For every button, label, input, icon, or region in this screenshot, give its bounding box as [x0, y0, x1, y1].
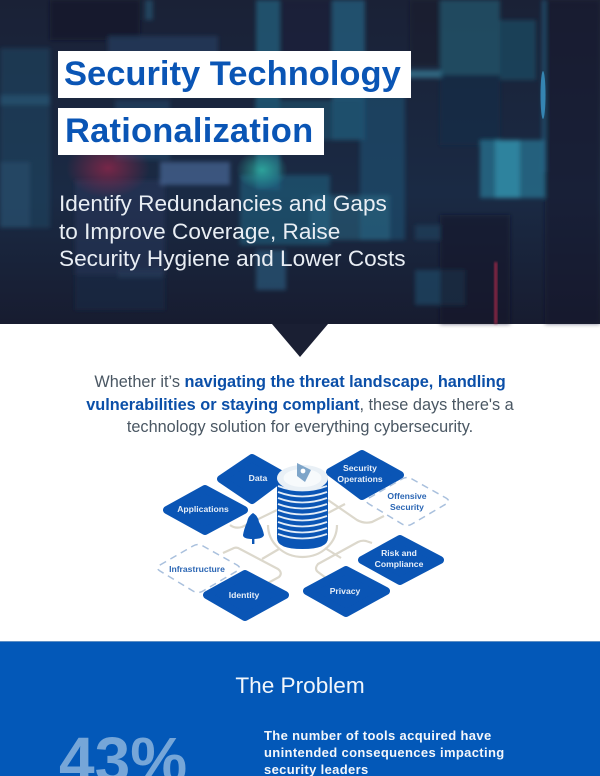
- text: problem statement: The number of tools acquired have: [264, 728, 492, 743]
- icon: server cylinder: [277, 463, 328, 549]
- subtitle: [59, 191, 406, 271]
- panel: the problem: [0, 641, 600, 776]
- diamond: Risk and Compliance: Compliance: [375, 559, 424, 569]
- panel: hero background: [0, 0, 600, 357]
- text: problem statement: [264, 728, 505, 776]
- diamond: Risk and Compliance: Risk and: [381, 548, 417, 558]
- heading: The Problem: The Problem: [235, 673, 365, 698]
- diamond: Offensive Security: Security: [390, 502, 424, 512]
- diamond: Infrastructure: Infrastructure: [169, 564, 225, 574]
- intro text: Whether it’s navigating the threat landscape, handling: [94, 373, 506, 391]
- arrow: pointer below hero: [272, 324, 328, 357]
- intro text: vulnerabilities or staying compliant, these days there's a: [86, 396, 514, 414]
- title line 2: Rationalization: [65, 112, 313, 150]
- subtitle: Identify Redundancies and Gaps: [59, 191, 387, 216]
- diamond: Security Operations: Operations: [337, 474, 383, 484]
- diamond: Infrastructure: [158, 544, 240, 592]
- intro text: technology solution for everything cybersecurity.: [127, 418, 473, 436]
- connector lines: [223, 500, 384, 583]
- text: problem statement: unintended consequences impacting: [264, 745, 505, 760]
- icon: tree: [243, 513, 264, 544]
- diamond: Identity: Identity: [229, 590, 259, 600]
- diamond: Risk and Compliance: [362, 539, 440, 581]
- diagram: security technology categories: [157, 450, 449, 621]
- diamond: Applications: [167, 489, 244, 531]
- diamond: Privacy: Privacy: [330, 586, 361, 596]
- diamond: Applications: Applications: [177, 504, 229, 514]
- subtitle: to Improve Coverage, Raise: [59, 219, 340, 244]
- diamond: Offensive Security: Offensive: [387, 491, 427, 501]
- intro text: [86, 373, 514, 436]
- diamond: Data: [221, 458, 284, 500]
- diamond: Security Operations: Security: [343, 463, 377, 473]
- subtitle: Security Hygiene and Lower Costs: [59, 246, 406, 271]
- title line 1: Security Technology: [64, 55, 401, 93]
- diamond: Identity: [207, 574, 285, 617]
- diamond: Security Operations: [330, 454, 400, 496]
- diamond: Data: Data: [249, 473, 268, 483]
- diamond: Offensive Security: [366, 478, 448, 526]
- diamond: Privacy: [307, 570, 386, 613]
